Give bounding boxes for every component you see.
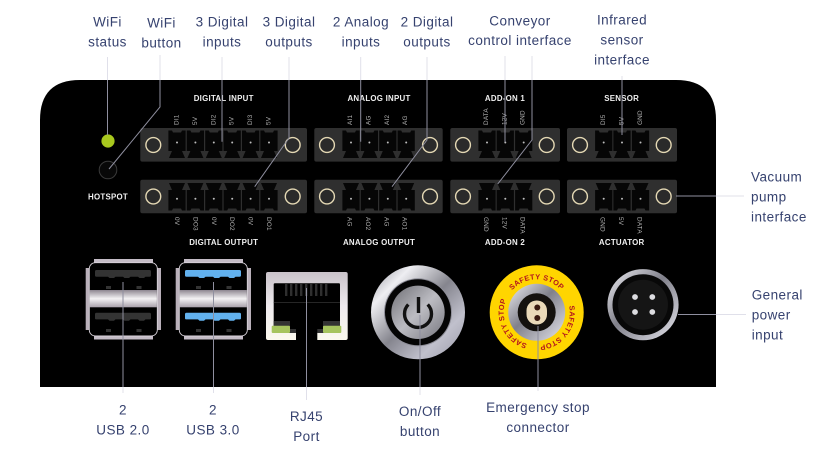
panel: digital terminal blocks: 5V	[192, 116, 199, 125]
panel: digital terminal blocks: 0V	[210, 217, 217, 226]
panel: digital terminal blocks: DI1	[174, 114, 180, 125]
label: general power input: power	[752, 307, 791, 322]
label: vacuum pump interface: pump	[751, 189, 787, 204]
label: 2 USB 2.0: USB 2.0	[96, 423, 150, 438]
leader lines inside panel	[108, 80, 716, 387]
icon: emergency stop connector with safety ring: SAFETY STOP	[498, 298, 526, 348]
label: conveyor control interface: control interface	[468, 33, 572, 48]
status LED: WiFi	[101, 134, 115, 148]
panel: analog terminal blocks: AG	[382, 217, 389, 227]
label: on/off button: On/Off	[399, 404, 441, 419]
panel: digital terminal blocks: DIGITAL INPUT	[194, 94, 254, 103]
label: conveyor control interface: Conveyor	[489, 13, 551, 28]
panel: add-on terminal blocks	[450, 94, 560, 247]
panel: digital terminal blocks: 0V	[173, 217, 180, 226]
panel: digital terminal blocks: DO2	[228, 217, 235, 231]
icon: USB 3.0 ports	[176, 259, 251, 340]
panel: sensor and actuator terminal blocks: 5V	[617, 217, 624, 226]
panel: add-on terminal blocks: ADD-ON 2	[485, 238, 525, 247]
icon: USB 2.0 ports	[86, 259, 161, 340]
panel: add-on terminal blocks: GND	[520, 110, 527, 125]
label: 3 digital inputs: inputs	[203, 35, 241, 50]
panel: digital terminal blocks: DI2	[210, 114, 217, 125]
label: infrared sensor interface: sensor	[600, 33, 644, 48]
label: vacuum pump interface: interface	[751, 209, 807, 224]
panel: sensor and actuator terminal blocks: GND	[598, 217, 606, 232]
panel: add-on terminal blocks: 12V	[500, 217, 507, 230]
panel: add-on terminal blocks: ADD-ON 1	[485, 94, 525, 103]
label: WiFi button: WiFi	[147, 16, 176, 31]
panel: sensor and actuator terminal blocks: SENSOR	[604, 94, 639, 103]
label: 2 digital outputs: outputs	[403, 35, 451, 50]
icon: WiFi hotspot button	[99, 161, 117, 179]
label: 2 USB 3.0: 2	[209, 403, 217, 418]
panel: digital terminal blocks: DI3	[247, 114, 254, 125]
panel: add-on terminal blocks: GND	[482, 217, 489, 232]
label: RJ45 port: RJ45	[290, 409, 323, 424]
label: vacuum pump interface: Vacuum	[751, 169, 802, 184]
icon: emergency stop connector with safety ring: SAFETY STOP	[540, 306, 575, 350]
panel: sensor and actuator terminal blocks: 5V	[618, 116, 625, 125]
panel: digital terminal blocks: DO1	[265, 217, 272, 231]
panel: analog terminal blocks: AG	[346, 217, 352, 227]
label: WiFi button: button	[141, 36, 182, 51]
icon: emergency stop connector with safety ring	[490, 265, 584, 360]
leader lines outside panel	[108, 55, 746, 400]
panel: digital terminal blocks: 5V	[266, 116, 272, 125]
panel: digital terminal blocks: 0V	[247, 217, 254, 226]
panel: digital terminal blocks	[140, 94, 307, 247]
icon: power on/off button	[371, 265, 465, 359]
panel: analog terminal blocks: ANALOG INPUT	[347, 94, 411, 103]
label: emergency stop connector: connector	[506, 420, 570, 435]
label: 2 USB 3.0: USB 3.0	[186, 423, 240, 438]
label: 2 analog inputs: 2 Analog	[333, 15, 389, 30]
panel: digital terminal blocks: DO3	[191, 217, 198, 231]
icon: RJ45 port	[266, 272, 348, 340]
label: general power input: General	[752, 287, 803, 302]
panel: digital terminal blocks: 5V	[229, 116, 236, 125]
panel: analog terminal blocks: ANALOG OUTPUT	[343, 238, 415, 247]
label: WiFi status: status	[88, 35, 127, 50]
panel: sensor and actuator terminal blocks: DI5	[600, 114, 607, 125]
panel: analog terminal blocks: AG	[365, 115, 372, 125]
panel: digital terminal blocks: DIGITAL OUTPUT	[189, 238, 258, 247]
label: 2 USB 2.0: 2	[119, 403, 127, 418]
label: emergency stop connector: Emergency stop	[486, 400, 590, 415]
label: on/off button: button	[400, 424, 440, 439]
panel: sensor and actuator terminal blocks: DATA	[635, 217, 642, 234]
panel: sensor and actuator terminal blocks: GND	[637, 110, 644, 125]
panel: add-on terminal blocks: DATA	[483, 108, 490, 125]
label: 2 digital outputs: 2 Digital	[401, 15, 453, 30]
panel: sensor and actuator terminal blocks	[567, 94, 677, 247]
label: infrared sensor interface: interface	[594, 53, 650, 68]
heading: hotspot: HOTSPOT	[88, 192, 128, 202]
icon: emergency stop connector with safety ring: SAFETY STOP	[509, 274, 564, 290]
label: infrared sensor interface: Infrared	[597, 13, 647, 28]
panel: analog terminal blocks: AO2	[364, 217, 371, 231]
panel: analog terminal blocks: AI1	[347, 115, 354, 125]
panel: analog terminal blocks: AG	[402, 115, 409, 125]
panel: sensor and actuator terminal blocks: ACTUATOR	[599, 238, 645, 247]
label: 3 digital inputs: 3 Digital	[196, 15, 248, 30]
panel: analog terminal blocks	[314, 94, 443, 247]
icon: general power input connector	[607, 269, 679, 340]
label: 3 digital outputs: 3 Digital	[263, 15, 315, 30]
label: general power input: input	[752, 327, 783, 342]
label: RJ45 port: Port	[293, 429, 320, 444]
label: 3 digital outputs: outputs	[265, 35, 313, 50]
panel: analog terminal blocks: AO1	[401, 217, 408, 231]
panel: add-on terminal blocks: 12V	[501, 112, 508, 125]
panel: analog terminal blocks: AI2	[384, 115, 391, 125]
label: WiFi status: WiFi	[93, 15, 122, 30]
main black panel	[40, 80, 716, 387]
panel: add-on terminal blocks: DATA	[519, 217, 526, 234]
label: 2 analog inputs: inputs	[342, 35, 380, 50]
